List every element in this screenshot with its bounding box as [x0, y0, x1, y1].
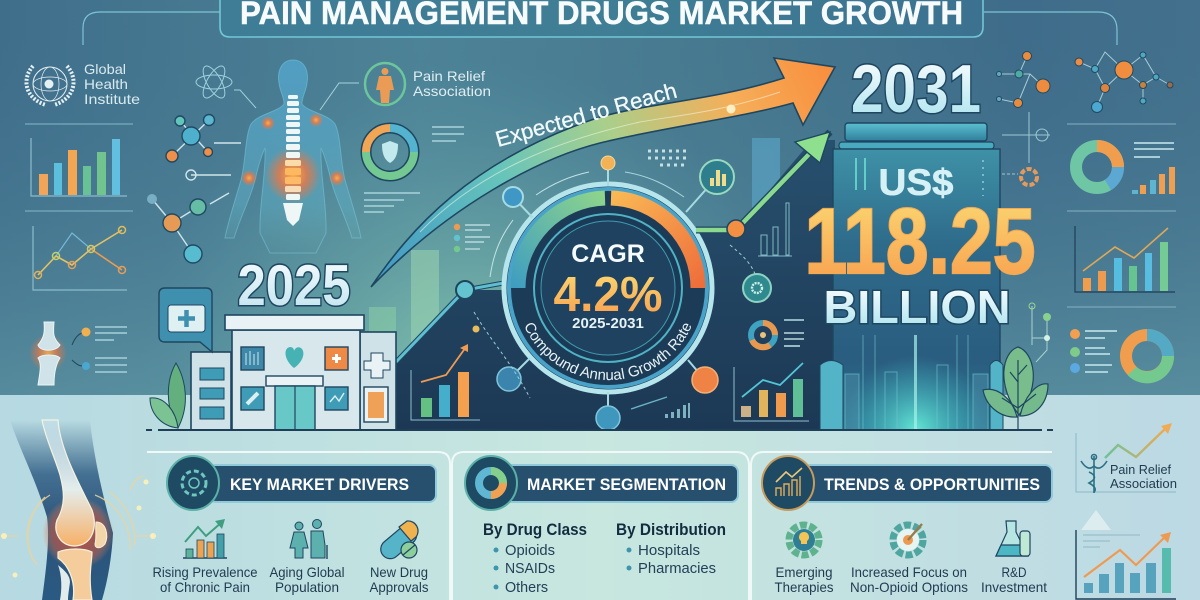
chart: dark panel left — [411, 344, 480, 420]
logo: Pain Relief Association with chart: Association — [1110, 476, 1177, 491]
human body with spine — [225, 60, 361, 253]
fibula — [58, 565, 70, 600]
icon: shield donut — [364, 127, 464, 212]
tower side columns — [820, 360, 843, 430]
roof slab — [225, 315, 364, 330]
pale background bars — [369, 138, 780, 380]
gauge satellite nodes — [472, 156, 771, 430]
CAGR gauge: 4.2% — [554, 268, 662, 322]
org name: Institute — [84, 91, 140, 107]
distribution list: Hospitals — [638, 543, 700, 559]
trend labels: Investment — [981, 579, 1047, 595]
tower — [820, 122, 1004, 429]
header icon: trend chart — [762, 456, 814, 510]
logo: Pain Relief Association with chart — [1076, 423, 1177, 493]
trend labels: Therapies — [774, 579, 834, 595]
gauge inner disc — [534, 214, 682, 362]
header pill — [505, 465, 738, 502]
header pill: MARKET SEGMENTATION — [527, 475, 726, 494]
drug class list: Others — [505, 580, 548, 596]
pain arcs and dots — [0, 476, 153, 565]
panel: key market drivers — [152, 456, 436, 595]
heart logo — [285, 347, 303, 368]
icon: gear with bulb — [789, 525, 819, 555]
green growth arrow — [696, 132, 830, 238]
icon: molecule one — [166, 114, 241, 162]
dividers between bottom panels — [147, 452, 1052, 600]
pain points — [241, 113, 345, 186]
org name — [84, 61, 140, 107]
right molecule small — [996, 52, 1050, 108]
distribution list — [616, 521, 726, 577]
icon: gear with target — [893, 524, 923, 555]
CAGR gauge: 2025-2031 — [572, 315, 644, 332]
spine — [283, 95, 303, 226]
logo: Pain Relief Association with chart: Pain Relief — [1110, 462, 1171, 477]
logo: Pain Relief Association top: Association — [413, 83, 491, 99]
medical sign bubble — [159, 288, 212, 352]
chart: left line chart — [25, 211, 133, 290]
hospital — [150, 315, 396, 430]
main block — [232, 330, 360, 430]
distribution list: Pharmacies — [638, 561, 716, 577]
tower glow — [844, 335, 988, 429]
gauge text: CAGR — [571, 240, 645, 268]
icon: compass and gear — [1002, 112, 1050, 185]
value US$ 118.25 billion: BILLION — [824, 281, 1010, 333]
logo: Pain Relief Association top — [320, 63, 491, 110]
driver labels: Population — [275, 579, 339, 595]
femur — [42, 420, 94, 546]
right legend with donut — [1029, 303, 1176, 377]
driver labels: of Chronic Pain — [160, 579, 250, 595]
leg silhouette — [10, 420, 113, 600]
icon: molecule two — [147, 170, 231, 263]
trend labels: Non-Opioid Options — [850, 579, 968, 595]
driver labels: Aging Global — [270, 564, 344, 580]
trend labels — [774, 564, 1047, 595]
chart: dark panel right — [734, 363, 809, 421]
driver labels: Approvals — [370, 579, 428, 595]
mini bars outline chart — [758, 203, 792, 256]
plant — [150, 363, 185, 428]
drug class list: Opioids — [505, 543, 555, 559]
driver labels: New Drug — [370, 564, 428, 580]
driver labels — [152, 564, 428, 595]
icon: wreath globe — [26, 66, 74, 105]
tower cap — [845, 123, 987, 141]
ground line — [146, 429, 1053, 431]
windows — [241, 347, 264, 370]
icon: caduceus — [1081, 454, 1107, 493]
curved label: Compound Annual Growth Rate — [526, 323, 691, 380]
drug class list: By Drug Class — [483, 521, 587, 539]
header icon: donut — [465, 456, 517, 510]
trend labels: Emerging — [776, 564, 832, 580]
side details — [200, 368, 224, 380]
icon: knee joint with legend — [29, 322, 127, 385]
legend dots beside gauge — [454, 151, 686, 277]
header pill: TRENDS & OPPORTUNITIES — [824, 475, 1040, 494]
header pill — [803, 465, 1052, 502]
org name: Global — [84, 61, 126, 77]
knee illustration — [0, 420, 156, 600]
logo: Pain Relief Association top: Pain Relief — [413, 68, 485, 84]
logo: Global Health Institute — [26, 61, 140, 107]
chart: left bar chart — [25, 124, 133, 196]
big growth arrow — [371, 58, 835, 287]
drug class list: NSAIDs — [505, 561, 555, 577]
value US$ 118.25 billion: 118.25 — [804, 189, 1036, 293]
chart: bottom right growth — [1076, 510, 1176, 599]
chart: right growth bars — [1067, 211, 1176, 292]
value US$ 118.25 billion: US$ — [878, 162, 954, 203]
pain glow — [265, 147, 321, 203]
chart: right donut and bars — [1067, 124, 1176, 194]
panel: trends and opportunities — [762, 456, 1052, 595]
header pill — [209, 465, 436, 502]
panel: market segmentation — [465, 456, 738, 596]
mini donut in dark panel — [751, 320, 804, 347]
trend labels: Increased Focus on — [851, 564, 967, 580]
side wings — [191, 352, 231, 430]
header pill: KEY MARKET DRIVERS — [230, 475, 409, 494]
tower body — [833, 149, 1000, 430]
icon: atom — [196, 63, 256, 108]
header icon: gear — [167, 456, 219, 510]
tree right of tower — [983, 347, 1048, 430]
dark central panel — [396, 140, 835, 430]
gauge coloured arcs — [518, 198, 605, 288]
right molecule large — [1075, 52, 1173, 112]
tibia — [58, 549, 92, 600]
driver labels: Rising Prevalence — [152, 564, 258, 580]
distribution list: By Distribution — [616, 521, 726, 539]
mini ascending bars — [631, 397, 690, 418]
gauge outer rings — [504, 184, 712, 392]
icon: lab flask — [996, 521, 1030, 556]
kneecap — [95, 522, 107, 548]
CAGR gauge — [502, 182, 714, 394]
background: upper teal band — [0, 0, 1200, 395]
year 2031: 2031 — [851, 50, 981, 127]
trend labels: R&D — [1002, 564, 1026, 580]
org name: Health — [84, 76, 128, 92]
arrow label: Expected to Reach — [493, 78, 680, 152]
inflamed joint — [42, 497, 114, 569]
drug class list — [483, 521, 587, 596]
body silhouette — [225, 60, 361, 253]
year 2025: 2025 — [238, 253, 350, 317]
icon: elderly couple — [290, 520, 327, 559]
value US$ 118.25 billion — [804, 162, 1036, 333]
icon: pills — [377, 521, 421, 563]
entrance — [266, 376, 323, 386]
icon: rising chart — [183, 519, 227, 558]
title banner — [83, 0, 1117, 45]
